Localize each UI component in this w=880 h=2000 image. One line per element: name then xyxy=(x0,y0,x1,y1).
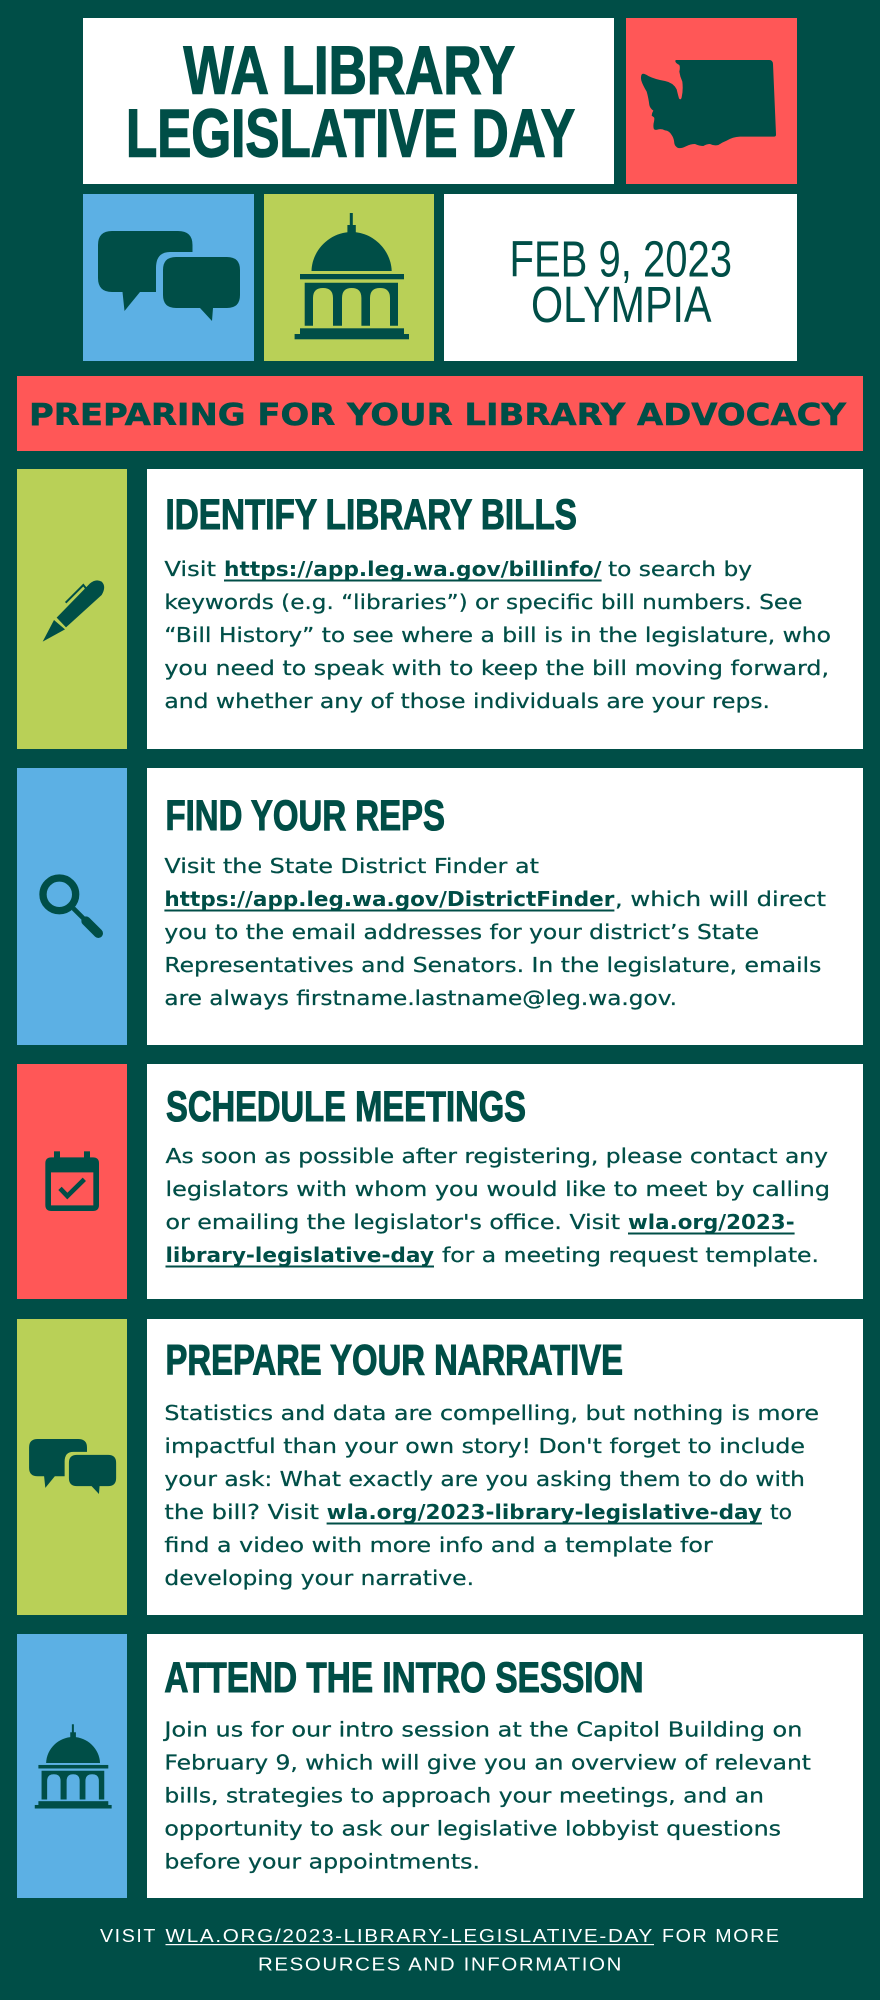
body text: or emailing the legislator's office. Visit xyxy=(166,1210,620,1234)
body text: impactful than your own story! Don't forget to include xyxy=(164,1434,805,1458)
content card xyxy=(147,1064,863,1299)
body text: to xyxy=(770,1500,792,1524)
heading: PREPARE YOUR NARRATIVE xyxy=(166,1336,623,1384)
footer text: FOR MORE xyxy=(662,1925,781,1946)
body text: you need to speak with to keep the bill moving forward, xyxy=(164,656,829,680)
panel: date and place xyxy=(444,194,797,361)
footer text: RESOURCES AND INFORMATION xyxy=(258,1954,623,1975)
body text xyxy=(162,1718,811,1874)
panel: attend the intro session xyxy=(17,1634,863,1898)
icon: speech bubbles xyxy=(98,231,240,321)
body text: find a video with more info and a template for xyxy=(164,1533,714,1557)
body text: opportunity to ask our legislative lobbyist questions xyxy=(164,1817,781,1841)
panel: schedule meetings xyxy=(17,1064,863,1299)
content card xyxy=(147,1319,863,1615)
title: WA LIBRARY xyxy=(184,33,515,109)
body text: , which will direct xyxy=(615,887,826,911)
body text: you to the email addresses for your district’s State xyxy=(164,920,759,944)
body text: before your appointments. xyxy=(164,1850,480,1874)
title xyxy=(126,33,575,172)
sidebar with magnifier icon xyxy=(17,768,127,1045)
sidebar with capitol icon xyxy=(17,1634,127,1898)
panel: Washington state map xyxy=(626,18,797,184)
panel: prepare your narrative xyxy=(17,1319,863,1615)
icon: capitol building xyxy=(295,213,409,339)
body text xyxy=(164,557,831,713)
footer text: VISIT xyxy=(100,1925,157,1946)
date and location text: FEB 9, 2023 xyxy=(510,231,732,288)
body text: bills, strategies to approach your meetings, and an xyxy=(164,1784,764,1808)
icon: calendar with check xyxy=(45,1151,99,1211)
body text xyxy=(164,854,826,1010)
footer text xyxy=(100,1925,781,1975)
body text: developing your narrative. xyxy=(164,1566,474,1590)
body text xyxy=(166,1144,830,1268)
body text xyxy=(164,1401,819,1590)
body text: your ask: What exactly are you asking them to do with xyxy=(164,1467,805,1491)
body text: Statistics and data are compelling, but nothing is more xyxy=(164,1401,819,1425)
body text: to search by xyxy=(608,557,752,581)
heading: preparing for your library advocacy: PREPARING FOR YOUR LIBRARY ADVOCACY xyxy=(29,398,847,433)
body text: https://app.leg.wa.gov/DistrictFinder xyxy=(164,887,615,911)
body text: legislators with whom you would like to meet by calling xyxy=(166,1177,830,1201)
panel: section banner xyxy=(17,376,863,451)
body text: https://app.leg.wa.gov/billinfo/ xyxy=(224,557,602,581)
body text: Visit the State District Finder at xyxy=(164,854,539,878)
body text: wla.org/2023-library-legislative-day xyxy=(327,1500,762,1524)
content card xyxy=(147,1634,863,1898)
sidebar with calendar icon xyxy=(17,1064,127,1299)
icon: capitol building xyxy=(35,1724,112,1809)
title: LEGISLATIVE DAY xyxy=(126,96,575,172)
panel: speech bubbles xyxy=(83,194,254,361)
body text: Representatives and Senators. In the legislature, emails xyxy=(164,953,821,977)
sidebar with pen icon xyxy=(17,469,127,749)
panel: find your reps xyxy=(17,768,863,1045)
body text: As soon as possible after registering, please contact any xyxy=(166,1144,828,1168)
heading: SCHEDULE MEETINGS xyxy=(166,1083,526,1131)
body text: for a meeting request template. xyxy=(442,1243,819,1267)
icon: magnifying glass xyxy=(43,878,98,933)
body text: Join us for our intro session at the Capitol Building on xyxy=(162,1718,802,1742)
date and location text xyxy=(510,231,732,333)
icon: speech bubbles xyxy=(29,1439,116,1494)
body text: Visit xyxy=(164,557,216,581)
content card xyxy=(147,768,863,1045)
body text: are always firstname.lastname@leg.wa.gov. xyxy=(164,986,677,1010)
content card xyxy=(147,469,863,749)
sidebar with speech bubbles icon xyxy=(17,1319,127,1615)
body text: the bill? Visit xyxy=(164,1500,319,1524)
body text: and whether any of those individuals are your reps. xyxy=(164,689,770,713)
body text: library-legislative-day xyxy=(166,1243,434,1267)
panel: title xyxy=(83,18,614,184)
body text: February 9, which will give you an overview of relevant xyxy=(164,1751,811,1775)
body text: keywords (e.g. “libraries”) or specific bill numbers. See xyxy=(164,590,802,614)
icon: pen xyxy=(43,580,104,642)
date and location text: OLYMPIA xyxy=(531,276,712,333)
footer text: WLA.ORG/2023-LIBRARY-LEGISLATIVE-DAY xyxy=(166,1925,654,1946)
body text: wla.org/2023- xyxy=(628,1210,795,1234)
heading: ATTEND THE INTRO SESSION xyxy=(164,1654,644,1702)
heading: FIND YOUR REPS xyxy=(166,792,445,840)
icon: Washington state silhouette xyxy=(641,60,776,148)
panel: identify library bills xyxy=(17,469,863,749)
panel: capitol building xyxy=(264,194,434,361)
body text: “Bill History” to see where a bill is in the legislature, who xyxy=(164,623,831,647)
heading: IDENTIFY LIBRARY BILLS xyxy=(166,491,577,539)
